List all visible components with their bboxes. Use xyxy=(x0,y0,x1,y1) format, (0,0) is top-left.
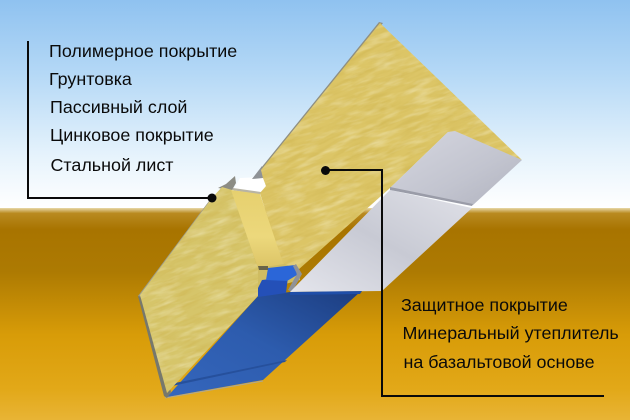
panel: blue lower steel face xyxy=(167,292,360,397)
panel: blue tongue lock, upper bar xyxy=(266,265,297,281)
leader line: right bracket xyxy=(321,166,604,396)
text block: steel sheet layers: Полимерное покрытие xyxy=(49,41,237,61)
text block: core layers: Защитное покрытие xyxy=(401,295,568,315)
panel: metal strip under gap xyxy=(232,188,261,195)
panel: steel rim at bottom of blue face xyxy=(165,381,263,398)
text block: steel sheet layers: Стальной лист xyxy=(50,155,174,175)
panel: outer steel edge of upper side xyxy=(138,197,214,297)
panel: steel edge of right block xyxy=(261,22,383,170)
panel: blue face crease xyxy=(172,360,287,386)
panel: grey tooth of left lock xyxy=(218,176,236,190)
panel: grey tooth of right lock xyxy=(252,166,263,179)
panel: wool backing around lock xyxy=(256,260,300,292)
background: sky xyxy=(0,0,630,208)
panel: steel lock strip xyxy=(288,264,302,292)
leader line: left bracket xyxy=(28,41,216,202)
text block: core layers xyxy=(401,295,619,372)
text block: core layers: Минеральный утеплитель xyxy=(402,323,619,343)
text block: core layers: на базальтовой основе xyxy=(404,352,595,372)
panel: left mineral wool block xyxy=(140,187,258,393)
panel: right mineral wool block xyxy=(260,23,522,270)
panel: silver fold xyxy=(390,187,473,206)
panel: light central tongue of wool xyxy=(231,190,284,268)
panel: dark lock notch xyxy=(258,266,268,270)
sandwich panel illustration xyxy=(138,22,522,398)
panel: silver lower face xyxy=(290,190,472,292)
text block: steel sheet layers: Пассивный слой xyxy=(50,97,187,117)
text block: steel sheet layers: Грунтовка xyxy=(49,69,132,89)
panel: silver upper face xyxy=(390,131,522,205)
background: ground xyxy=(0,208,630,420)
panel: blue edge below silver xyxy=(290,291,362,295)
text block: steel sheet layers xyxy=(49,41,237,175)
panel: steel edge left xyxy=(138,295,171,398)
text block: steel sheet layers: Цинковое покрытие xyxy=(50,125,214,145)
panel: white gap at tongue joint xyxy=(234,177,266,194)
panel: blue tongue lock, lower part xyxy=(258,277,288,297)
